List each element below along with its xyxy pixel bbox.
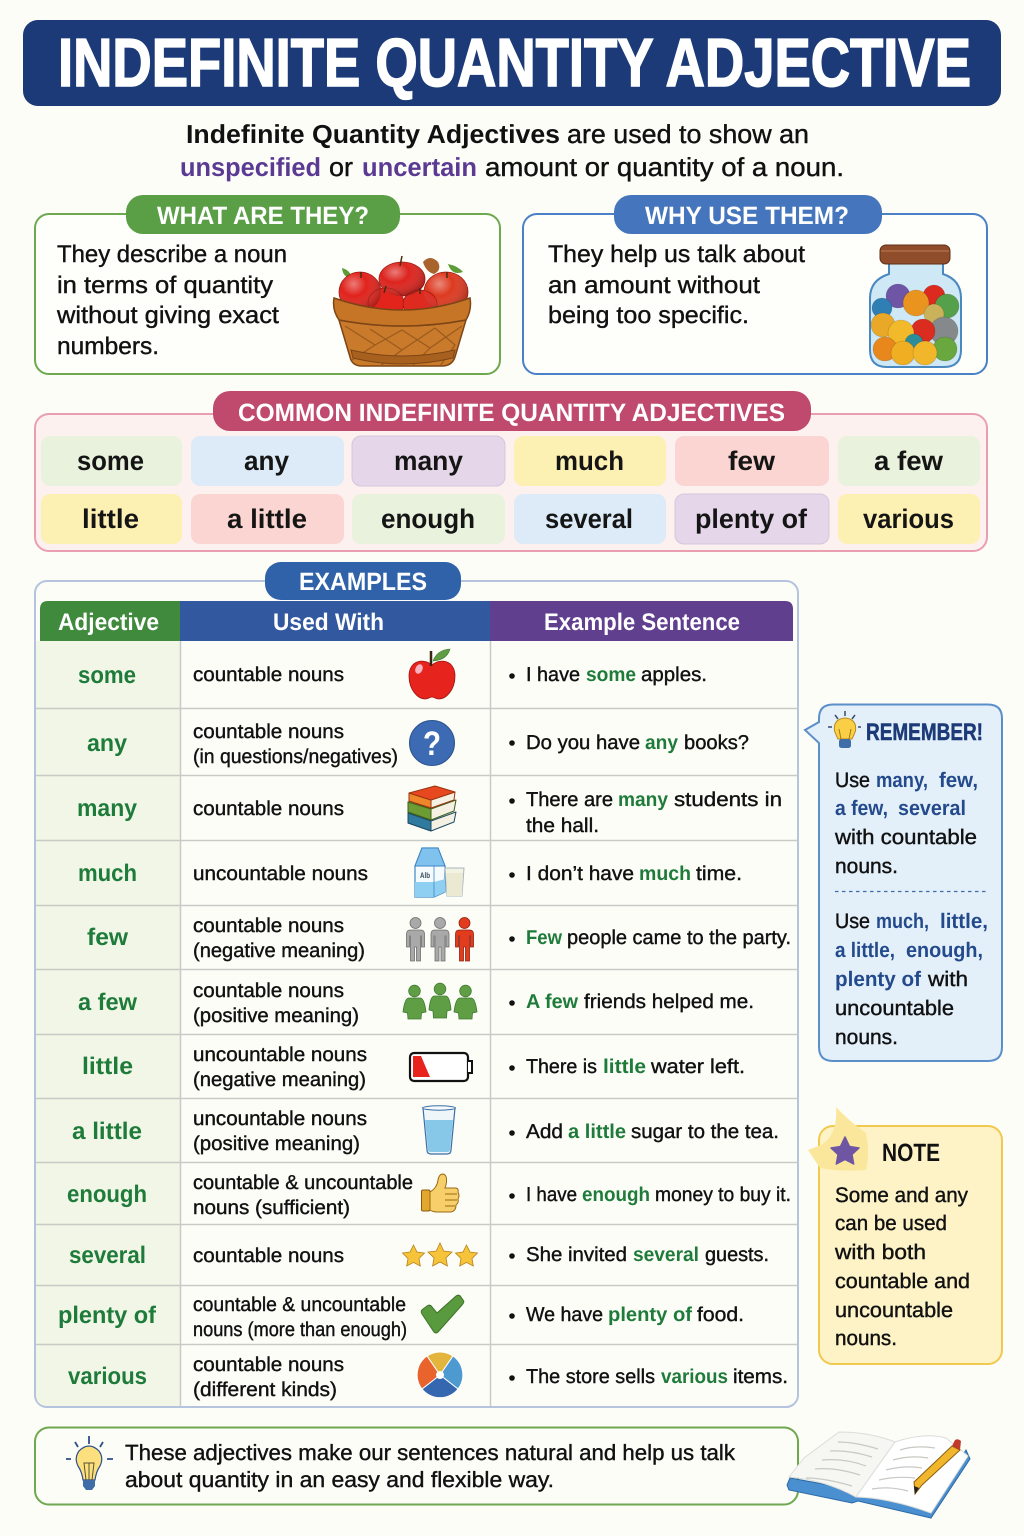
text: countable rule: few, (939, 769, 978, 792)
chip: some: some (77, 446, 144, 476)
text: why use them: They help us talk about (548, 241, 805, 268)
text: footer message: about quantity in an easy and flexible way. (125, 1467, 554, 1492)
intro text: Indefinite Quantity Adjectives (186, 119, 560, 149)
table header: Adjective (58, 609, 159, 636)
row: little: little (603, 1056, 646, 1078)
chip: plenty of: plenty of (695, 504, 808, 534)
text: what are they: numbers. (57, 333, 159, 360)
chip: a little: a little (227, 504, 307, 534)
chip: much: much (555, 446, 624, 476)
row: a little: sugar to the tea. (631, 1121, 779, 1143)
chip: various (838, 494, 980, 544)
icon: milk carton and glass (415, 848, 464, 897)
row: various: various (68, 1363, 147, 1390)
panel: examples table (35, 562, 798, 1407)
row: enough (67, 1172, 791, 1219)
intro text: or (329, 152, 353, 182)
chip: a little (191, 494, 344, 544)
callout: note: NOTE (882, 1139, 940, 1167)
row: some: some (78, 662, 136, 689)
chip: little: little (82, 504, 139, 534)
icon: low battery (410, 1053, 472, 1081)
text: note body: countable and (835, 1270, 970, 1293)
icon: glass of water (422, 1106, 456, 1154)
chip: any (191, 436, 344, 486)
heading: examples: EXAMPLES (299, 568, 427, 596)
row: plenty of (58, 1294, 744, 1341)
chip: some (41, 436, 182, 486)
first column shading (36, 641, 180, 1406)
table header: Example Sentence (544, 609, 740, 636)
icon: jar of marbles (870, 245, 961, 367)
icon: three green people (403, 983, 477, 1019)
icon: question mark (410, 720, 454, 766)
row: any: countable nouns (193, 721, 344, 743)
row: much (78, 848, 742, 897)
icon: question mark: ? (423, 725, 441, 763)
text: note body: nouns. (835, 1327, 897, 1350)
row: many: students in (674, 789, 782, 811)
heading: why use them (614, 195, 882, 234)
row: any: books? (684, 732, 749, 754)
chip: enough: enough (381, 504, 475, 534)
heading: why use them: WHY USE THEM? (645, 202, 849, 230)
text: what are they: They describe a noun (57, 241, 287, 268)
row: many: the hall. (526, 815, 599, 837)
icon: check mark (421, 1295, 464, 1333)
table header: Used With (273, 609, 384, 636)
row: few: few (87, 924, 128, 951)
chip: a few: a few (874, 446, 944, 476)
icon: open book with pencil (787, 1432, 970, 1518)
row: a little: a little (568, 1121, 626, 1143)
row: enough: money to buy it. (655, 1184, 791, 1206)
row: various: items. (733, 1366, 788, 1388)
chip: various: various (863, 504, 954, 534)
intro text: are used to show an (567, 119, 809, 149)
intro text: uncertain (362, 152, 477, 182)
icon: three stars (402, 1243, 478, 1266)
chip: plenty of (675, 494, 829, 544)
text: why use them: being too specific. (548, 302, 749, 329)
row: few: people came to the party. (567, 927, 791, 949)
row: many: There are (526, 789, 613, 811)
text: what are they (56, 241, 287, 360)
row: few: Few (526, 927, 562, 949)
row: much: much (639, 863, 691, 885)
row: plenty of: plenty of (58, 1302, 157, 1329)
panel: common indefinite quantity adjectives (35, 391, 987, 551)
text: countable rule: several (898, 797, 966, 820)
text: uncountable rule: with (927, 968, 968, 991)
row: much: time. (696, 863, 742, 885)
row: little: There is (526, 1056, 597, 1078)
icon: thumbs up (422, 1174, 459, 1212)
row: any: any (87, 730, 128, 757)
text: uncountable rule: nouns. (835, 1026, 898, 1049)
text: uncountable rule: Use (835, 910, 870, 933)
text: uncountable rule: a little, (835, 939, 895, 962)
text: why use them: an amount without (548, 272, 760, 299)
chip: little (41, 494, 182, 544)
text: note body: with both (834, 1241, 926, 1264)
row: little (82, 1044, 745, 1091)
table header (40, 601, 793, 641)
row: a little: Add (526, 1121, 563, 1143)
text: what are they: in terms of quantity (57, 272, 273, 299)
row: any: (in questions/negatives) (193, 746, 398, 768)
panel: why use them (523, 195, 987, 374)
row: little: little (82, 1053, 133, 1080)
row: plenty of: We have (526, 1304, 603, 1326)
row: various: various (661, 1366, 728, 1388)
icon: purple star (831, 1137, 859, 1164)
row: a few: a few (78, 989, 137, 1016)
row: some: countable nouns (193, 664, 344, 686)
row: a little (72, 1106, 779, 1155)
icon: colour wheel (417, 1352, 463, 1398)
row: plenty of: food. (697, 1304, 744, 1326)
heading: common adjectives (213, 391, 811, 431)
chip: many (352, 436, 505, 486)
text: note body: Some and any (835, 1184, 968, 1207)
icon: three people, one red (406, 918, 474, 961)
row: a few (78, 980, 754, 1027)
row: plenty of: plenty of (608, 1304, 692, 1326)
text: uncountable rule: enough, (906, 939, 983, 962)
row: a little: (positive meaning) (193, 1133, 360, 1155)
title banner (23, 20, 1001, 106)
text: countable rule: with countable (834, 826, 977, 849)
row: plenty of: countable & uncountable (193, 1294, 406, 1316)
text: uncountable rule: much, (876, 910, 929, 933)
row: enough: nouns (sufficient) (193, 1197, 350, 1219)
text: countable rule: nouns. (835, 855, 898, 878)
row: some: I have (526, 664, 580, 686)
row: much: much (78, 860, 137, 887)
callout: note (808, 1107, 1002, 1364)
text: countable rule: many, (876, 769, 928, 792)
row: enough: enough (582, 1184, 650, 1206)
footer callout (35, 1428, 798, 1504)
intro text (180, 119, 844, 182)
row: various: The store sells (526, 1366, 655, 1388)
panel: what are they (35, 195, 500, 374)
chip: a few (838, 436, 980, 486)
row: several: guests. (705, 1244, 769, 1266)
heading: common adjectives: COMMON INDEFINITE QUANTITY ADJECTIVES (238, 399, 785, 427)
chip: much (514, 436, 666, 486)
row: a few: (positive meaning) (193, 1005, 359, 1027)
row: several: countable nouns (193, 1245, 344, 1267)
icon: light bulb (828, 711, 861, 748)
heading: what are they (126, 195, 400, 234)
row: many: many (77, 795, 138, 822)
text: what are they: without giving exact (56, 302, 279, 329)
row: some: some (586, 664, 636, 686)
heading: examples (265, 562, 461, 600)
text: countable rule (834, 769, 978, 878)
row: various (68, 1352, 788, 1401)
text: uncountable rule: uncountable (835, 997, 954, 1020)
text: why use them (548, 241, 805, 329)
heading: what are they: WHAT ARE THEY? (157, 202, 369, 230)
row: a little: uncountable nouns (193, 1108, 367, 1130)
chip: few (675, 436, 829, 486)
chip: enough (352, 494, 505, 544)
row: a few: countable nouns (193, 980, 344, 1002)
text: uncountable rule: little, (940, 910, 988, 933)
row: few (87, 915, 791, 962)
row: any: Do you have (526, 732, 640, 754)
row: some (78, 649, 707, 699)
row: many (77, 786, 782, 837)
icon: footer light bulb (66, 1436, 113, 1490)
row: little: water left. (650, 1056, 745, 1078)
text: note body (834, 1184, 970, 1350)
icon: milk carton and glass: Alb (420, 871, 430, 880)
row: many: countable nouns (193, 798, 344, 820)
chip: many: many (394, 446, 463, 476)
text: footer message: These adjectives make our sentences natural and help us talk (125, 1440, 736, 1465)
intro text: amount or quantity of a noun. (485, 152, 844, 182)
row: little: (negative meaning) (193, 1069, 366, 1091)
text: note body: uncountable (835, 1299, 953, 1322)
row: some: apples. (641, 664, 707, 686)
icon: books (408, 786, 456, 831)
row: plenty of: nouns (more than enough) (193, 1319, 407, 1341)
row: much: uncountable nouns (193, 863, 368, 885)
intro text: unspecified (180, 152, 321, 182)
row: any (87, 720, 749, 768)
row: various: (different kinds) (193, 1379, 337, 1401)
row: a little: a little (72, 1118, 142, 1145)
row: any: any (645, 732, 679, 754)
chip: several (514, 494, 666, 544)
icon: basket of apples (334, 256, 470, 366)
row: few: (negative meaning) (193, 940, 365, 962)
chip: few: few (728, 446, 776, 476)
callout: remember: REMEMBER! (866, 719, 983, 746)
text: countable rule: Use (835, 769, 870, 792)
row: much: I don’t have (526, 863, 634, 885)
chip: several: several (545, 504, 633, 534)
text: uncountable rule: plenty of (835, 968, 922, 991)
text: uncountable rule (835, 910, 988, 1049)
row: several: several (633, 1244, 699, 1266)
chip: any: any (244, 446, 289, 476)
text: footer message (125, 1440, 736, 1492)
row: a few: friends helped me. (584, 991, 754, 1013)
row: enough: enough (67, 1181, 147, 1208)
row: few: countable nouns (193, 915, 344, 937)
text: countable rule: a few, (835, 797, 888, 820)
row: a few: A few (526, 991, 578, 1013)
callout: remember (805, 704, 1002, 1061)
row: enough: I have (526, 1184, 577, 1206)
row: enough: countable & uncountable (193, 1172, 413, 1194)
icon: apple (409, 649, 455, 699)
row: several: several (69, 1242, 146, 1269)
row: several (69, 1242, 769, 1269)
row: various: countable nouns (193, 1354, 344, 1376)
text: note body: can be used (835, 1212, 947, 1235)
row: many: many (618, 789, 669, 811)
row: several: She invited (526, 1244, 627, 1266)
row: little: uncountable nouns (193, 1044, 367, 1066)
